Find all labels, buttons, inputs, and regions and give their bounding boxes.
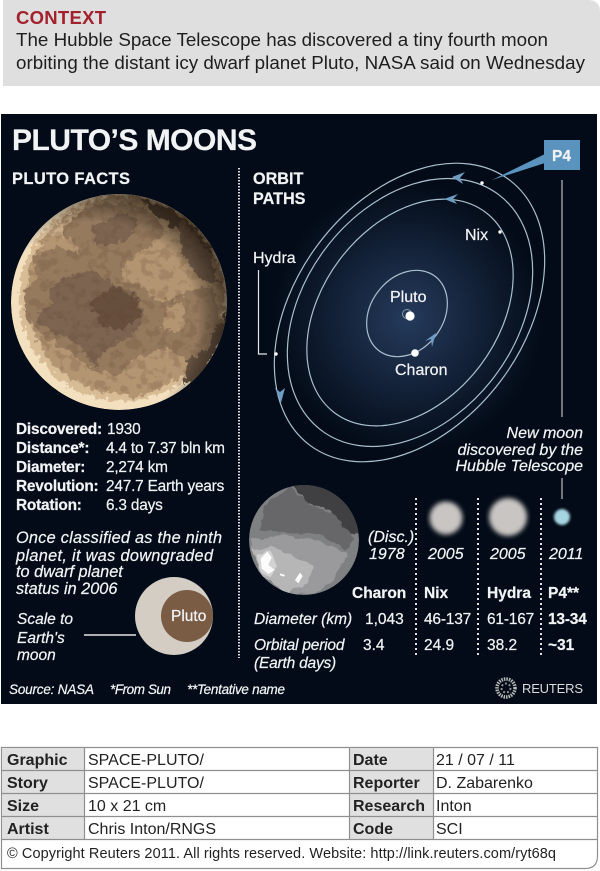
text: context body: The Hubble Space Telescope has discovered a tiny fourth moon (16, 29, 548, 50)
text: new moon note: Hubble Telescope (456, 458, 583, 475)
row: story: D. Zabarenko (436, 775, 533, 792)
terrain: speckle (26, 196, 224, 394)
table: moon names: Charon (352, 585, 406, 602)
text: scale to Earth's moon (17, 611, 73, 664)
table: moon names: P4** (548, 585, 580, 602)
image: Hydra (489, 498, 527, 536)
logo: Reuters: REUTERS (522, 681, 583, 696)
row: artist: Artist (7, 821, 49, 838)
table: orbital period row: Orbital period (254, 637, 346, 654)
arrow: P4 orbit (452, 172, 465, 184)
table: diameter row: 1,043 (365, 611, 404, 628)
panel: context (3, 0, 600, 86)
table: discovery years: 1978 (369, 546, 405, 563)
source line: *From Sun (110, 682, 171, 697)
marker: Hydra (274, 352, 278, 356)
arrow: Charon orbit (425, 333, 436, 347)
table: discovery years: 2005 (427, 546, 464, 563)
fact: distance: 4.4 to 7.37 bln km (106, 440, 225, 457)
row: story: Story (7, 775, 48, 792)
text: reclassification note: status in 2006 (16, 580, 118, 598)
table: orbital period row: 3.4 (363, 637, 385, 654)
text: new moon note: discovered by the (458, 442, 583, 459)
icon: Pluto scale circle (161, 590, 213, 642)
image: P4 (554, 509, 570, 525)
fact: discovered: 1930 (107, 421, 140, 438)
text: scale to Earth's moon: Earth's (17, 630, 65, 647)
leader line: P4 (561, 180, 563, 417)
divider (238, 168, 240, 658)
row: size: Size (7, 798, 39, 815)
table: diameter row: 13-34 (548, 611, 587, 628)
logo: Reuters (497, 679, 583, 697)
row: story (7, 775, 533, 792)
fact: distance: Distance*: (16, 440, 89, 457)
row: artist: Code (353, 821, 393, 838)
row: size (7, 798, 472, 815)
callout: P4: P4 (552, 148, 571, 165)
row: artist: Chris Inton/RNGS (88, 821, 216, 838)
table: orbital period row: (Earth days) (254, 655, 336, 672)
image: Nix (430, 502, 462, 534)
row: artist: SCI (436, 821, 463, 838)
source line: **Tentative name (187, 682, 285, 697)
text: scale to Earth's moon: moon (17, 647, 56, 664)
fact: revolution: 247.7 Earth years (106, 478, 225, 495)
callout: P4 (492, 140, 580, 180)
copyright: © Copyright Reuters 2011. All rights reserved. Website: http://link.reuters.com/ryt68q (7, 846, 556, 862)
marker: Nix (498, 230, 502, 234)
table: orbital period row: 38.2 (487, 637, 517, 654)
text: reclassification note: planet, it was downgraded (15, 547, 214, 565)
source line (9, 682, 285, 697)
arrow: Hydra orbit (275, 388, 285, 403)
table: orbital period row: ~31 (548, 637, 575, 654)
label: Hydra: Hydra (253, 250, 296, 267)
highlights: Charon (261, 552, 303, 583)
table: diameter row: Diameter (km) (254, 611, 352, 628)
row: size: Inton (436, 798, 472, 815)
heading: Pluto facts: PLUTO FACTS (12, 170, 130, 188)
fact: diameter: 2,274 km (106, 459, 168, 476)
table: orbital period row (254, 637, 575, 672)
table: moon names (352, 585, 580, 602)
table: discovery years: (Disc.) (368, 529, 414, 546)
label: Charon: Charon (395, 362, 447, 379)
marker: Pluto (402, 310, 415, 321)
text: reclassification note: Once classified as the ninth (16, 529, 222, 547)
text: scale to Earth's moon: Scale to (17, 611, 73, 628)
panel: Pluto's moons (1, 111, 600, 704)
marker: P4 (480, 181, 484, 185)
label: Pluto scale: Pluto (171, 608, 206, 625)
fact: diameter: Diameter: (16, 459, 85, 476)
row: graphic: Graphic (7, 752, 68, 769)
fact: revolution: Revolution: (16, 478, 98, 495)
table: moon names: Hydra (487, 585, 531, 602)
marker: Charon (411, 349, 419, 357)
column dividers (416, 498, 541, 657)
chart: orbit paths (219, 111, 600, 514)
table: diameter row (254, 611, 587, 628)
table: moon names: Nix (424, 585, 448, 602)
orbit: Nix (264, 159, 556, 466)
row: story: Reporter (353, 775, 420, 792)
row: graphic: Date (353, 752, 388, 769)
table: discovery years: 2005 (489, 546, 526, 563)
facts list (16, 421, 225, 514)
title: PLUTO’S MOONS (12, 124, 257, 157)
source line: Source: NASA (9, 682, 94, 697)
heading: orbit paths: PATHS (253, 190, 306, 208)
fact: rotation: Rotation: (16, 497, 82, 514)
table: orbital period row: 24.9 (424, 637, 454, 654)
arrows on orbits (275, 172, 465, 403)
row: artist (7, 821, 463, 838)
orbit background glow (273, 183, 543, 453)
fact: rotation: 6.3 days (106, 497, 163, 514)
scale leader line (84, 634, 136, 636)
row: size: 10 x 21 cm (88, 798, 166, 815)
text: new moon note: New moon (507, 425, 583, 442)
arrow: Nix orbit (444, 194, 458, 204)
text: context body second line: orbiting the distant icy dwarf planet Pluto, NASA said on Wednesday (16, 52, 586, 73)
table grid (2, 748, 597, 840)
table: discovery years (368, 529, 583, 563)
orbit: P4 (237, 131, 583, 494)
row: size: Research (353, 798, 425, 815)
orbit: Charon (350, 254, 464, 373)
text: reclassification note: to dwarf planet (16, 563, 124, 581)
label cell backgrounds (2, 748, 433, 839)
fact: discovered: Discovered: (16, 421, 102, 438)
row: graphic: SPACE-PLUTO/ (88, 752, 204, 769)
terrain: mid brown (23, 198, 230, 398)
row: graphic: 21 / 07 / 11 (436, 752, 515, 769)
row: story: SPACE-PLUTO/ (88, 775, 204, 792)
table: graphic credits (2, 748, 598, 868)
orbit: P4 outer (219, 111, 600, 514)
bracket: Hydra leader (258, 270, 267, 354)
image: Charon (249, 480, 363, 595)
leader line: P4 lower (561, 478, 563, 499)
row: graphic (7, 752, 515, 769)
heading: orbit paths: ORBIT (253, 170, 303, 188)
table: discovery years: 2011 (548, 546, 583, 563)
table: diameter row: 61-167 (487, 611, 534, 628)
heading: context: CONTEXT (16, 7, 107, 28)
text: reclassification note (15, 529, 222, 598)
table: diameter row: 46-137 (424, 611, 471, 628)
image: Pluto planet (11, 194, 230, 410)
label: Nix: Nix (465, 227, 488, 244)
icon: Earth's moon scale circle (135, 577, 213, 655)
text: new moon note (456, 425, 583, 475)
label: Pluto: Pluto (390, 289, 427, 306)
